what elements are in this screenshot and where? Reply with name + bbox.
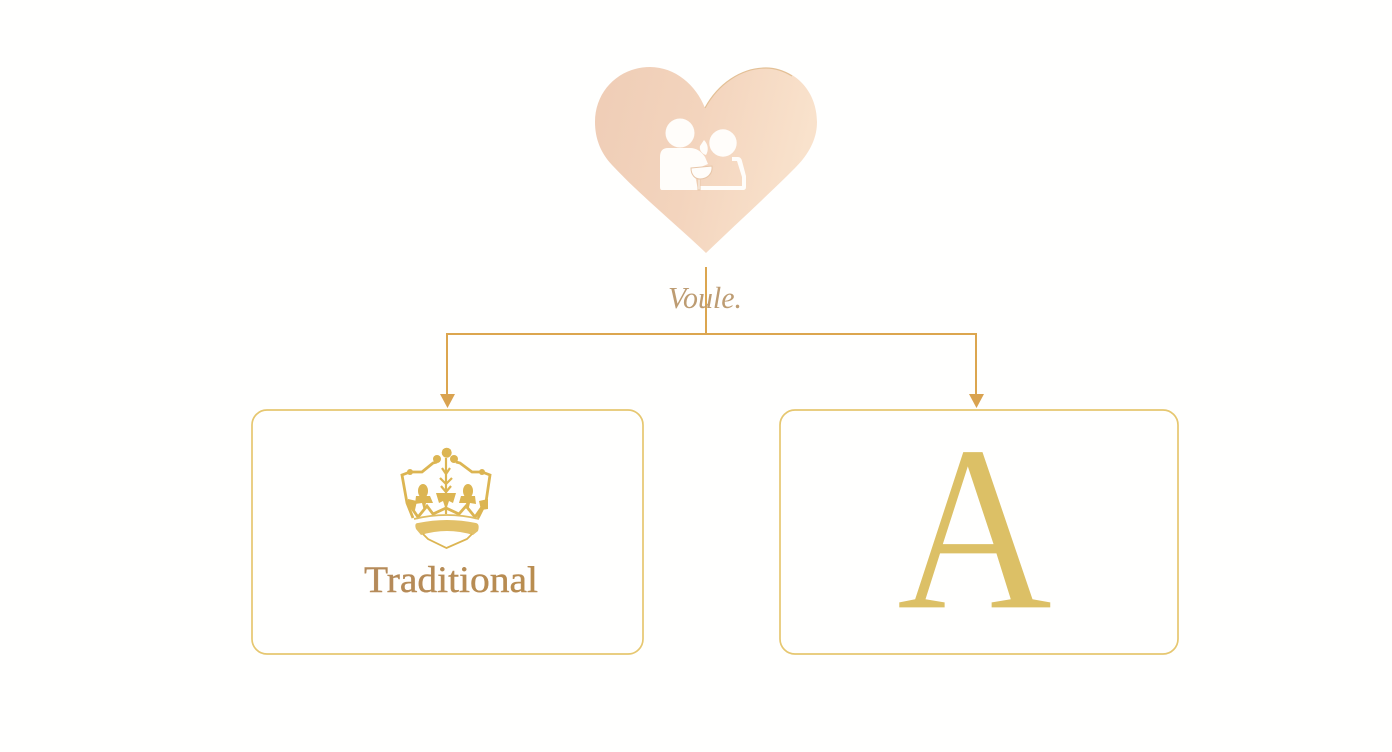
icon: left figure: [660, 118, 708, 190]
icon: bowl held between figures: [691, 166, 712, 190]
connector lines: [447, 267, 976, 397]
crown band: [414, 515, 479, 519]
crown top ornament: [407, 448, 485, 475]
icon: heart with family: [595, 67, 817, 253]
crown frame: [402, 462, 490, 518]
crown fleurs: [408, 484, 488, 511]
panel: traditional: [252, 410, 643, 654]
crown shield: [423, 534, 472, 548]
icon: drop: [700, 140, 708, 155]
icon: right figure: [700, 129, 746, 190]
heart shape: [595, 67, 817, 253]
arrow: left: [440, 394, 455, 408]
crown centre stem and fleurs: [440, 458, 452, 514]
arrow: right: [969, 394, 984, 408]
heart highlight edge: [705, 68, 792, 108]
label: Traditional: Traditional: [364, 560, 538, 601]
crown zigzag base: [411, 506, 482, 517]
icon: crown: [402, 448, 490, 548]
panel: A: [780, 410, 1178, 654]
letter A: A: [897, 398, 1052, 660]
heading: Voule: Voule.: [668, 280, 742, 315]
